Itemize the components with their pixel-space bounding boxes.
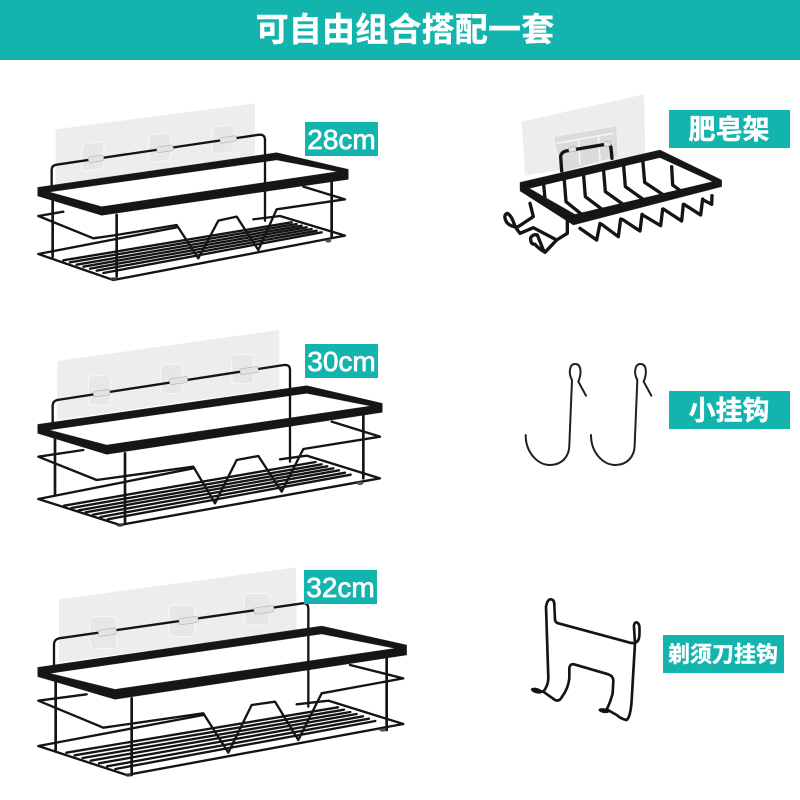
shelf: 28cm rack (38, 103, 348, 281)
soap dish rack (505, 94, 722, 252)
label: soap dish: 肥皂架 (688, 115, 770, 145)
size label: 30cm: 30cm (307, 346, 376, 377)
title banner: 可自由组合搭配一套 (256, 11, 554, 48)
shelf: 32cm rack (38, 567, 407, 777)
shelf: 30cm rack (38, 330, 382, 527)
label: soap dish (669, 110, 790, 148)
label: small hook: 小挂钩 (688, 396, 770, 426)
size label: 28cm: 28cm (307, 124, 376, 155)
title banner (0, 0, 800, 60)
label: small hook (669, 391, 790, 429)
size label: 32cm: 32cm (306, 572, 375, 603)
razor hook (530, 599, 640, 720)
small hooks (526, 364, 651, 465)
label: razor hook (663, 635, 784, 673)
label: razor hook: 剃须刀挂钩 (668, 642, 778, 667)
